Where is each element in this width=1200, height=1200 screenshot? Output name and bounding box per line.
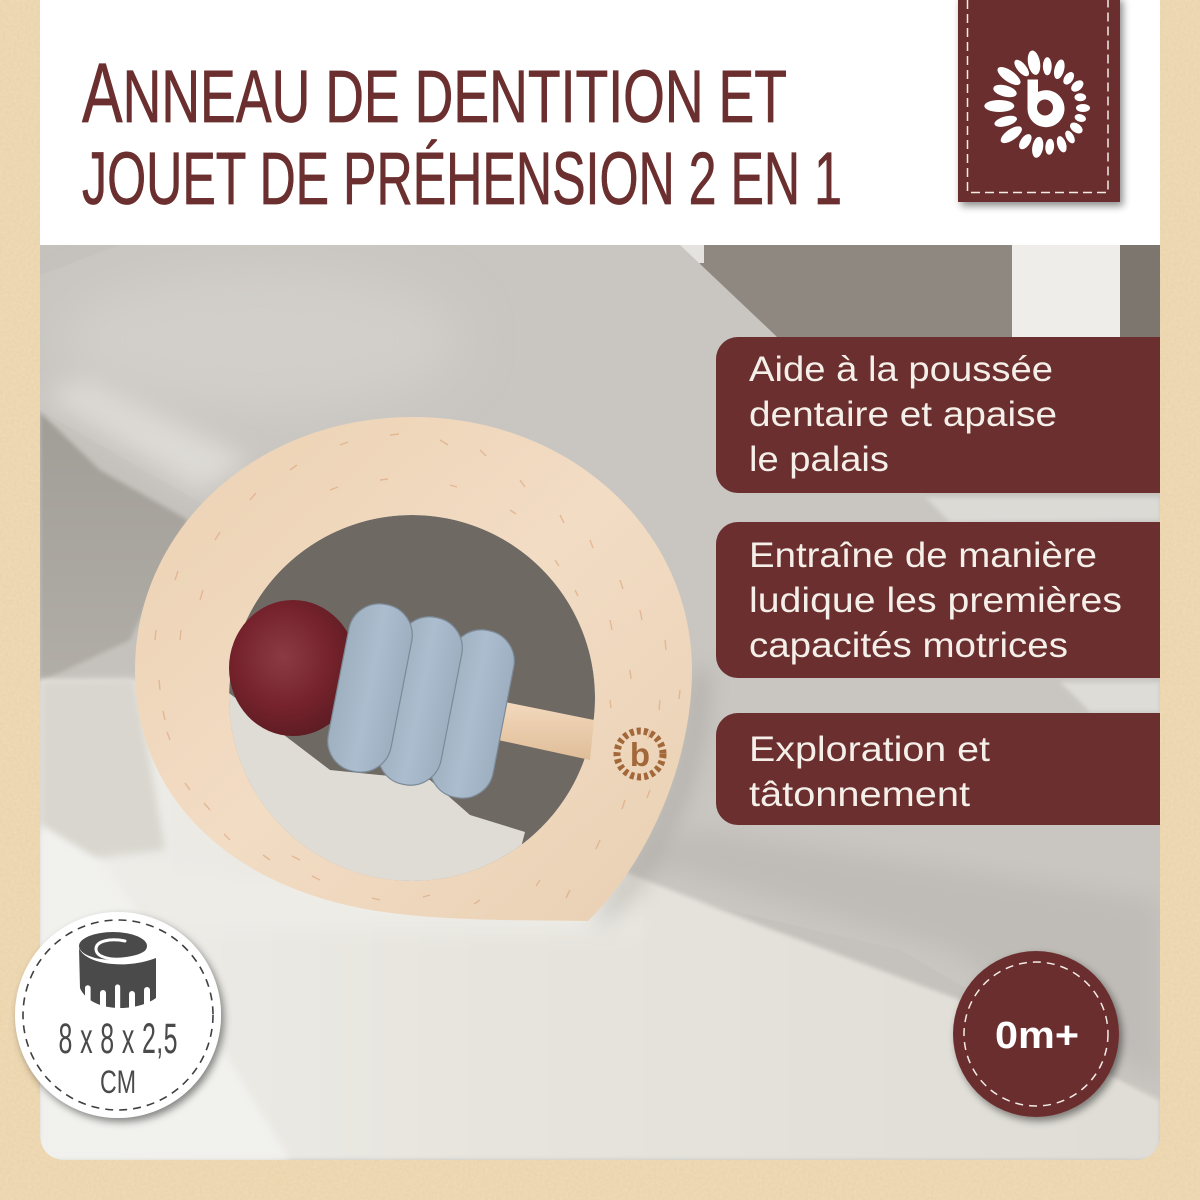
white linen fabric (40, 678, 1160, 1160)
brand tag with logo (958, 0, 1120, 202)
title: ANNEAU DE DENTITION ET (82, 46, 787, 140)
benefit card 1: Aide à la poussée (749, 350, 1053, 389)
view through the ring (220, 510, 600, 890)
title: JOUET DE PRÉHENSION 2 EN 1 (82, 137, 842, 220)
dimensions text (59, 1015, 177, 1100)
background wall and white post (680, 245, 1160, 345)
dimensions text: 8 x 8 x 2,5 (59, 1015, 177, 1063)
wooden stick (498, 702, 594, 760)
grey plush blanket (40, 245, 1160, 713)
title (82, 46, 842, 220)
benefit card 1: le palais (749, 440, 889, 479)
red bead (229, 600, 357, 736)
engraved logo: b (630, 736, 650, 773)
benefit card 3 (716, 713, 1160, 825)
blue silicone rings (322, 598, 520, 804)
engraved logo (617, 731, 663, 777)
benefit card 2: capacités motrices (749, 626, 1068, 665)
benefit card 3: Exploration et (749, 730, 990, 769)
benefit card 3: tâtonnement (749, 775, 970, 814)
dimensions text: CM (100, 1064, 136, 1100)
benefit card 2: ludique les premières (749, 581, 1122, 620)
ring shadow on the blanket (600, 670, 700, 920)
icon: measuring tape (79, 932, 156, 1012)
wooden ring (135, 417, 692, 921)
age badge: 0m+ (995, 1015, 1079, 1057)
age badge (953, 951, 1119, 1117)
benefit card 1: dentaire et apaise (749, 395, 1057, 434)
header panel (40, 0, 1160, 246)
size badge (15, 912, 221, 1118)
benefit card 2: Entraîne de manière (749, 536, 1097, 575)
wood grain (155, 434, 680, 904)
benefit card 1 (716, 337, 1160, 493)
benefit card 2 (716, 522, 1160, 678)
photo panel (40, 245, 1160, 1160)
